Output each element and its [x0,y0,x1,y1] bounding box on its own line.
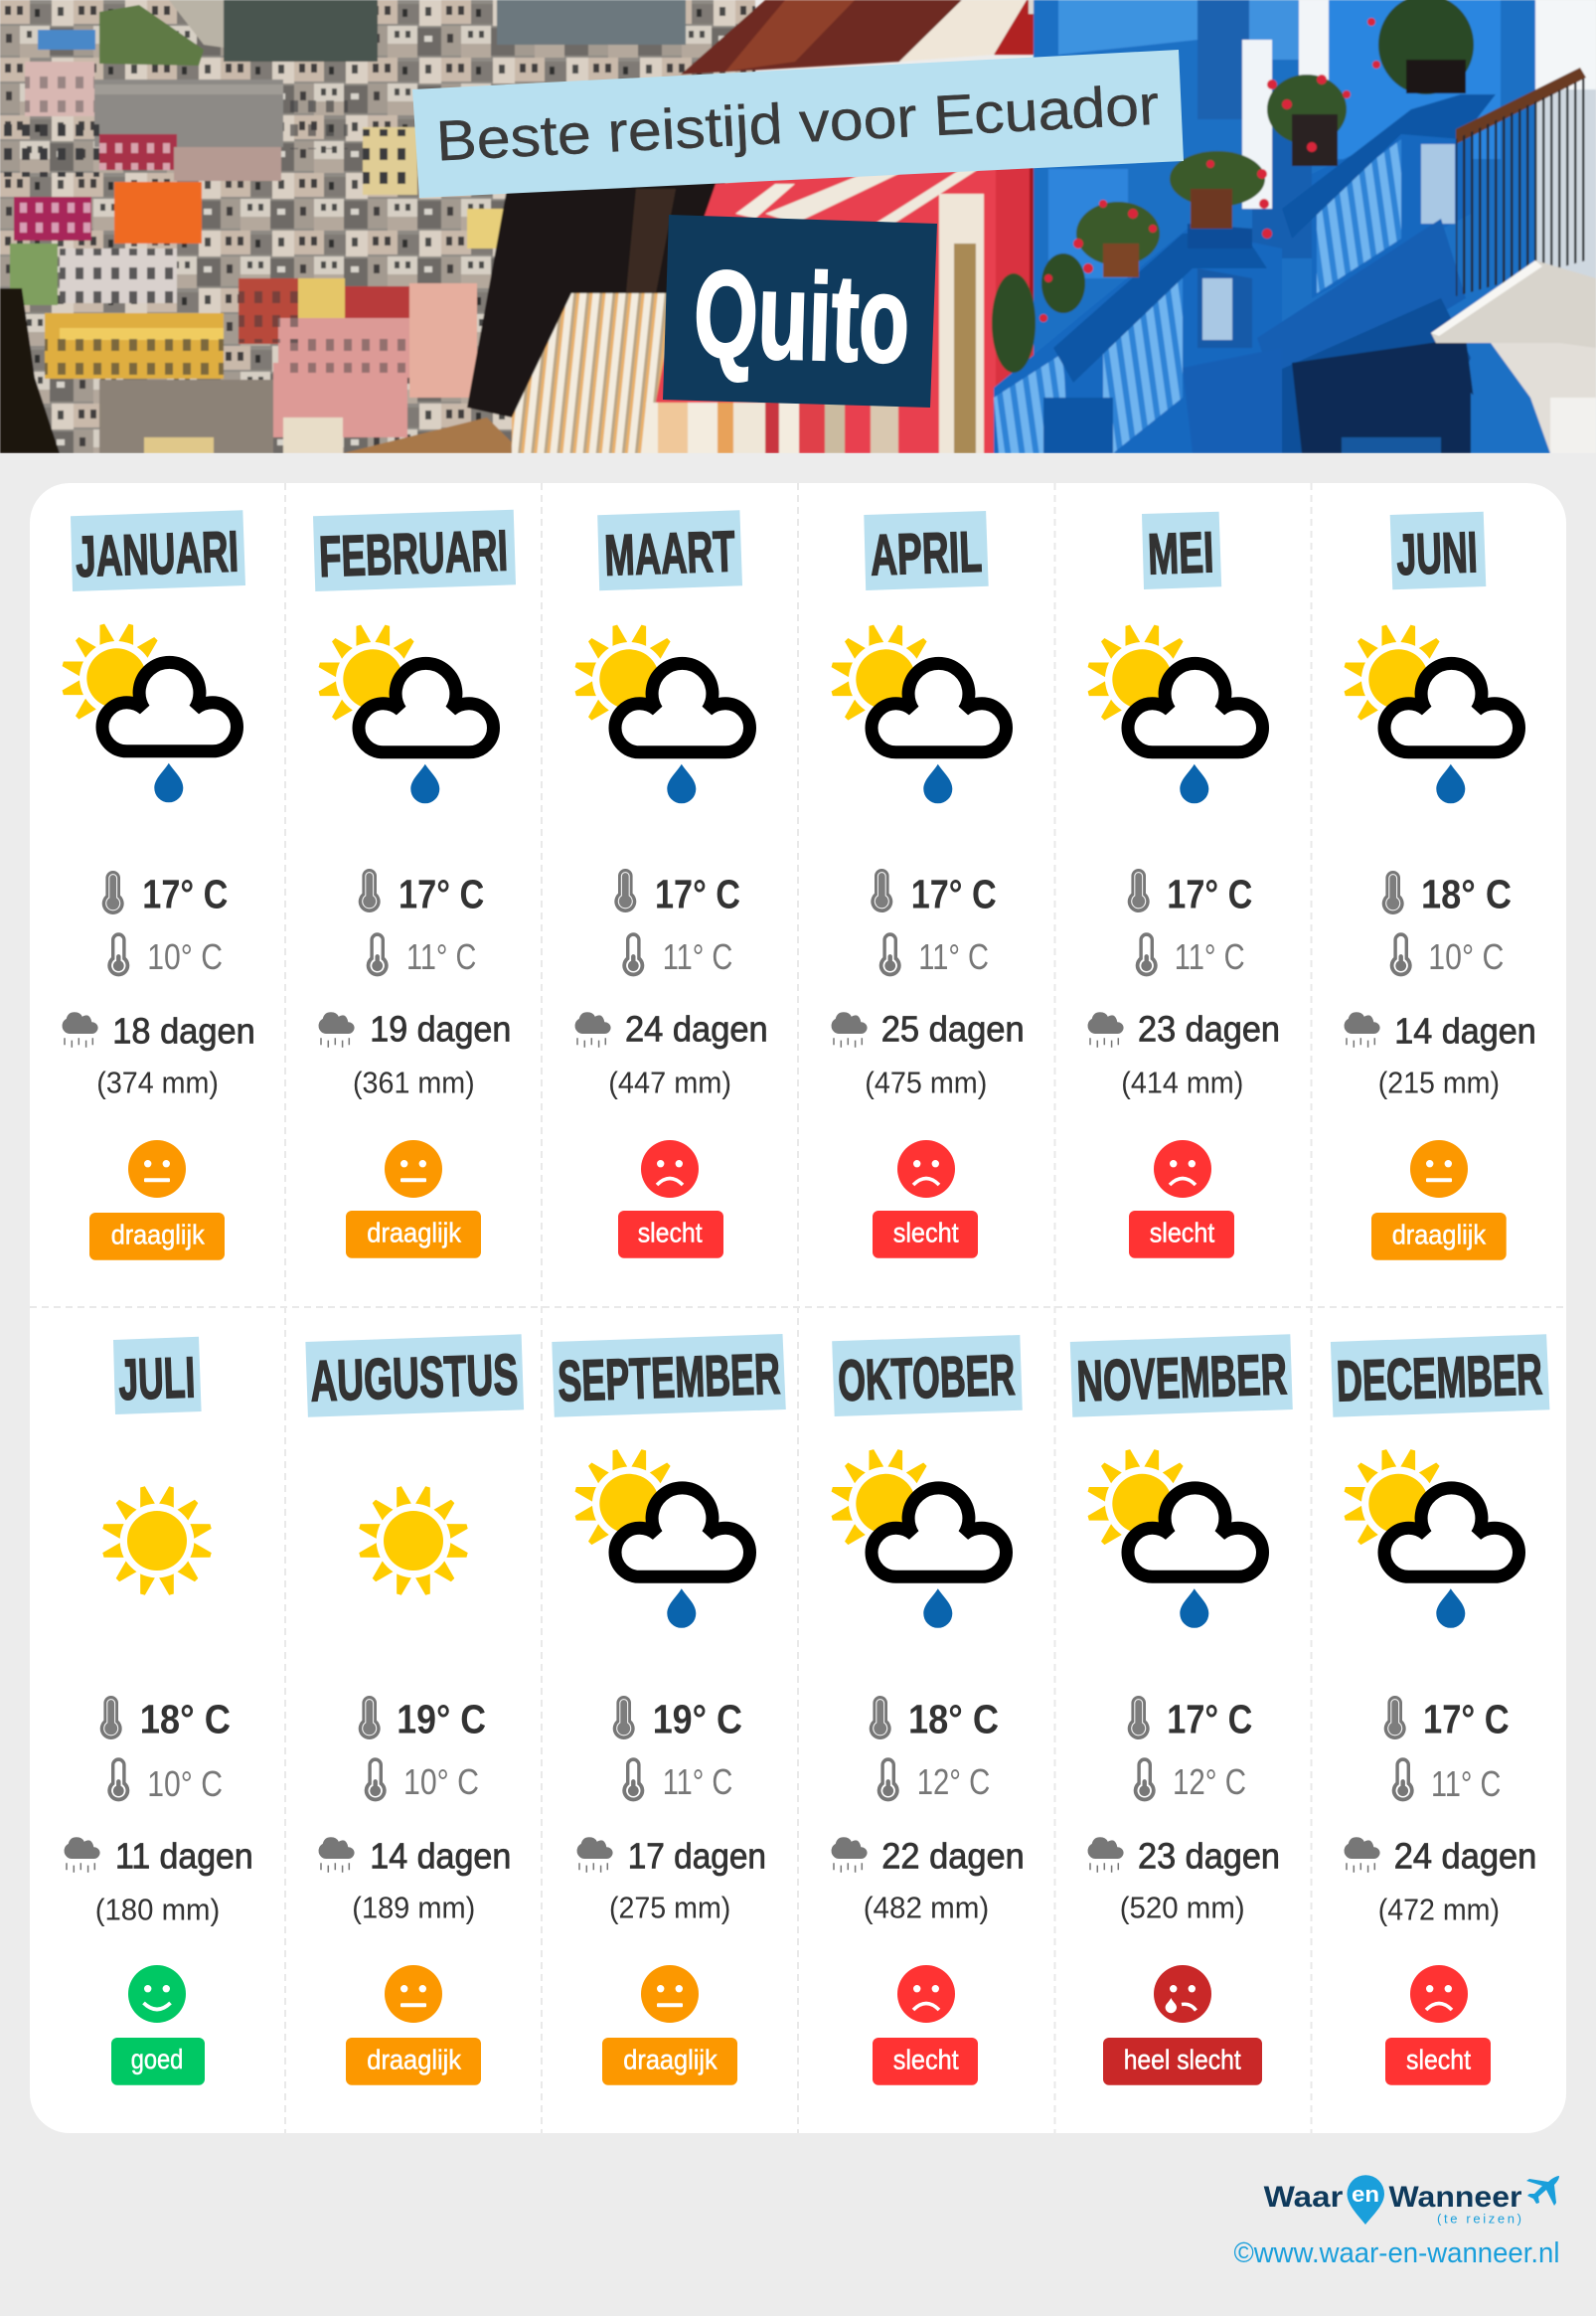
high temperature [100,1696,231,1741]
rain days [64,1835,253,1876]
high temperature [613,1696,742,1741]
icon: sun, cloud and rain [1343,623,1518,803]
rain days: 19 dagen [370,1008,511,1049]
rating icon [1154,1965,1211,2023]
rating badge [1103,2038,1262,2085]
rating icon [385,1965,442,2023]
month title [1070,1334,1293,1417]
month title: SEPTEMBER [557,1342,781,1413]
month: april [830,511,1025,1258]
rainfall: (180 mm) [95,1893,220,1927]
low temperature: 11° C [1175,936,1245,977]
rain days: 24 dagen [1394,1835,1536,1876]
month title [1142,512,1221,589]
low temperature: 10° C [147,1763,223,1804]
logo: Waar en Wanneer [1264,2175,1559,2227]
month title [832,1335,1023,1416]
rating badge: draaglijk [623,2045,718,2075]
low temperature [107,932,223,977]
rating badge [346,2038,481,2085]
high temperature: 17° C [399,871,484,916]
icon: sun, cloud and rain [573,1448,749,1628]
rating icon [385,1140,442,1198]
rating icon [1410,1965,1468,2023]
month title: JULI [117,1345,196,1412]
month title [113,1337,202,1414]
high temperature [1382,871,1512,916]
rain days: 22 dagen [881,1835,1025,1876]
low temperature [879,932,989,977]
high temperature [614,869,740,916]
icon: sun, cloud and rain [573,623,749,803]
month: augustus [305,1334,524,2085]
rating badge [89,1213,225,1260]
low temperature [622,1757,732,1802]
logo: Waar en Wanneer: Wanneer [1389,2181,1522,2214]
high temperature: 17° C [1167,871,1252,916]
high temperature: 17° C [655,871,740,916]
rating badge: draaglijk [367,1218,462,1248]
low temperature: 11° C [918,936,989,977]
rainfall: (472 mm) [1378,1893,1500,1927]
month title: JUNI [1395,520,1479,587]
icon: map pin [1348,2175,1384,2225]
rating icon [128,1140,186,1198]
low temperature [878,1757,990,1802]
rating badge [111,2038,205,2085]
low temperature [1134,1757,1246,1802]
month title [71,510,245,591]
rating badge [873,1211,978,1258]
header box: city name Quito [663,215,937,408]
low temperature [107,1757,223,1804]
rating badge: heel slecht [1124,2045,1241,2075]
month title: APRIL [870,520,983,587]
high temperature [870,1696,999,1741]
rain days: 14 dagen [370,1835,511,1876]
month: februari [313,510,516,1258]
icon: sun, cloud and rain [1086,1448,1262,1628]
low temperature: 10° C [147,936,223,977]
month: maart [573,510,768,1258]
rating icon [641,1965,699,2023]
header banner: subtitle: Beste reistijd voor Ecuador [434,74,1161,173]
month title: MAART [603,519,736,588]
icon: sun, cloud and rain [830,1448,1006,1628]
month title [864,511,989,590]
month: september [552,1334,786,2085]
rain days [576,1835,766,1876]
rating icon [641,1140,699,1198]
rain days: 24 dagen [625,1008,768,1049]
icon: sun [358,1485,469,1596]
rating icon [128,1965,186,2023]
month: juli [64,1337,253,2085]
rainfall: (361 mm) [353,1065,475,1099]
month: januari [61,510,255,1260]
rating badge [346,1211,481,1258]
high temperature: 19° C [397,1696,486,1741]
high temperature: 18° C [908,1696,999,1741]
month title: AUGUSTUS [309,1342,519,1413]
rating badge: slecht [638,1218,703,1248]
low temperature: 10° C [1428,936,1504,977]
low temperature [1136,932,1245,977]
high temperature [871,869,997,916]
low temperature: 10° C [403,1761,479,1802]
high temperature: 17° C [1423,1696,1510,1741]
high temperature [1128,1696,1252,1741]
high temperature [1384,1696,1510,1741]
rainfall: (482 mm) [864,1890,989,1924]
header banner: subtitle [412,50,1184,198]
high temperature [102,871,228,916]
rating badge: slecht [1406,2045,1471,2075]
rainfall: (275 mm) [609,1890,730,1924]
rating badge [1371,1213,1507,1260]
rating badge [1129,1211,1234,1258]
month: mei [1086,512,1280,1258]
rating badge [1385,2038,1491,2085]
logo: Waar en Wanneer: en [1352,2182,1379,2207]
rain days: 23 dagen [1138,1835,1280,1876]
rating badge: draaglijk [1392,1220,1487,1250]
main white panel [30,483,1566,2133]
rating icon [1154,1140,1211,1198]
rating icon [897,1140,955,1198]
rating badge: draaglijk [111,1220,206,1250]
rating icon [897,1965,955,2023]
month title [552,1334,786,1417]
website url: ©www.waar-en-wanneer.nl [1234,2237,1560,2269]
rainfall: (520 mm) [1120,1890,1245,1924]
rating icon [1410,1140,1468,1198]
logo: Waar en Wanneer: Waar [1264,2181,1344,2214]
high temperature: 17° C [1167,1696,1252,1741]
high temperature: 19° C [653,1696,742,1741]
icon: sun, cloud and rain [1343,1448,1518,1628]
month title [305,1334,524,1417]
low temperature: 11° C [663,1761,732,1802]
rating badge: slecht [893,1218,959,1248]
low temperature [622,932,732,977]
month: juni [1343,512,1536,1260]
month title: OKTOBER [837,1343,1016,1413]
rainfall: (189 mm) [352,1890,475,1924]
header box: city name Quito: Quito [692,246,911,389]
rainfall: (215 mm) [1378,1065,1500,1099]
high temperature: 17° C [142,871,228,916]
rating badge: goed [131,2044,183,2074]
rating badge [602,2038,737,2085]
low temperature: 12° C [1173,1761,1246,1802]
icon: sun [101,1485,213,1596]
high temperature [359,1696,486,1741]
low temperature [367,932,476,977]
high temperature [359,869,484,916]
header photo: Quito street and hillside [0,0,1596,453]
month title: NOVEMBER [1075,1342,1288,1413]
high temperature: 18° C [1421,871,1512,916]
month title: JANUARI [75,519,239,589]
logo: Waar en Wanneer: (te reizen) [1437,2212,1521,2227]
rain days: 25 dagen [881,1008,1025,1049]
high temperature: 18° C [140,1696,231,1741]
icon: airplane [1526,2176,1559,2206]
rainfall: (475 mm) [865,1065,987,1099]
rain days: 23 dagen [1138,1008,1280,1049]
rain days: 17 dagen [628,1835,766,1876]
month title: FEBRUARI [318,518,509,589]
icon: sun, cloud and rain [1086,623,1262,803]
rain days: 18 dagen [112,1010,255,1051]
rain days: 14 dagen [1394,1010,1536,1051]
month title [313,510,516,591]
month: november [1070,1334,1293,2085]
rating badge: slecht [1150,1218,1214,1248]
low temperature [365,1757,479,1802]
low temperature: 12° C [917,1761,990,1802]
rainfall: (414 mm) [1121,1065,1243,1099]
month: december [1331,1334,1549,2085]
month title: MEI [1147,520,1214,586]
rating badge [618,1211,723,1258]
rainfall: (374 mm) [96,1065,219,1099]
icon: sun, cloud and rain [830,623,1006,803]
rating badge: slecht [893,2045,959,2075]
rain days: 11 dagen [115,1835,253,1876]
low temperature: 11° C [663,936,732,977]
rating badge [873,2038,978,2085]
low temperature: 11° C [406,936,476,977]
low temperature [1390,932,1504,977]
high temperature [1128,869,1252,916]
low temperature: 11° C [1431,1763,1501,1804]
icon: sun, cloud and rain [317,623,493,803]
high temperature: 17° C [911,871,997,916]
month title [1390,512,1486,589]
rating badge: draaglijk [367,2045,462,2075]
month title [597,510,742,590]
rainfall: (447 mm) [608,1065,731,1099]
low temperature [1392,1757,1501,1804]
icon: sun, cloud and rain [61,622,237,802]
month: oktober [830,1335,1025,2085]
